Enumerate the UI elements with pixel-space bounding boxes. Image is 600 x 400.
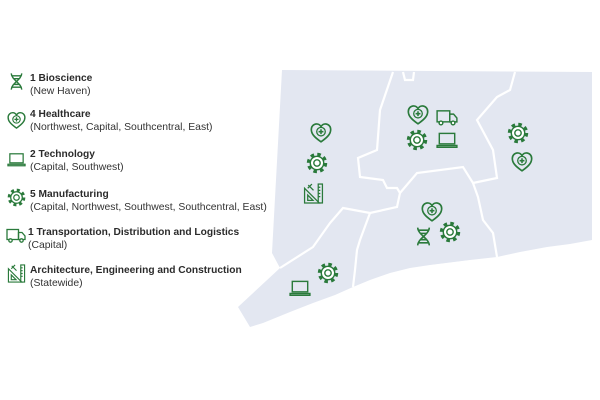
legend item: technology: (Capital, Southwest) [30, 162, 124, 173]
icons: Southcentral [418, 203, 459, 245]
legend item: manufacturing: (Capital, Northwest, Southwest, Southcentral, East) [30, 202, 267, 213]
legend item: technology: 2 Technology [30, 149, 95, 160]
legend [6, 73, 267, 289]
legend item: transportation: 1 Transportation, Distribution and Logistics [28, 227, 239, 238]
icons: Capital [408, 106, 457, 149]
state shape [238, 70, 592, 327]
legend item: healthcare: (Northwest, Capital, Southcentral, East) [30, 122, 212, 133]
legend item: architecture: Architecture, Engineering and Construction [30, 265, 242, 276]
legend item: bioscience: (New Haven) [30, 86, 91, 97]
legend item: bioscience [10, 73, 92, 97]
legend item: manufacturing: 5 Manufacturing [30, 189, 109, 200]
icons: East [509, 124, 532, 171]
legend item: technology [7, 149, 124, 173]
icons: Southwest [290, 264, 337, 295]
legend item: healthcare: 4 Healthcare [30, 109, 91, 120]
legend item: manufacturing [8, 188, 267, 213]
legend item: healthcare [7, 109, 212, 133]
icons: Northwest [305, 124, 331, 203]
legend item: bioscience: 1 Bioscience [30, 73, 92, 84]
legend item: transportation: (Capital) [28, 240, 67, 251]
legend item: architecture: (Statewide) [30, 278, 83, 289]
region borders [280, 72, 515, 287]
legend item: architecture [8, 264, 242, 289]
legend item: transportation [6, 227, 239, 251]
